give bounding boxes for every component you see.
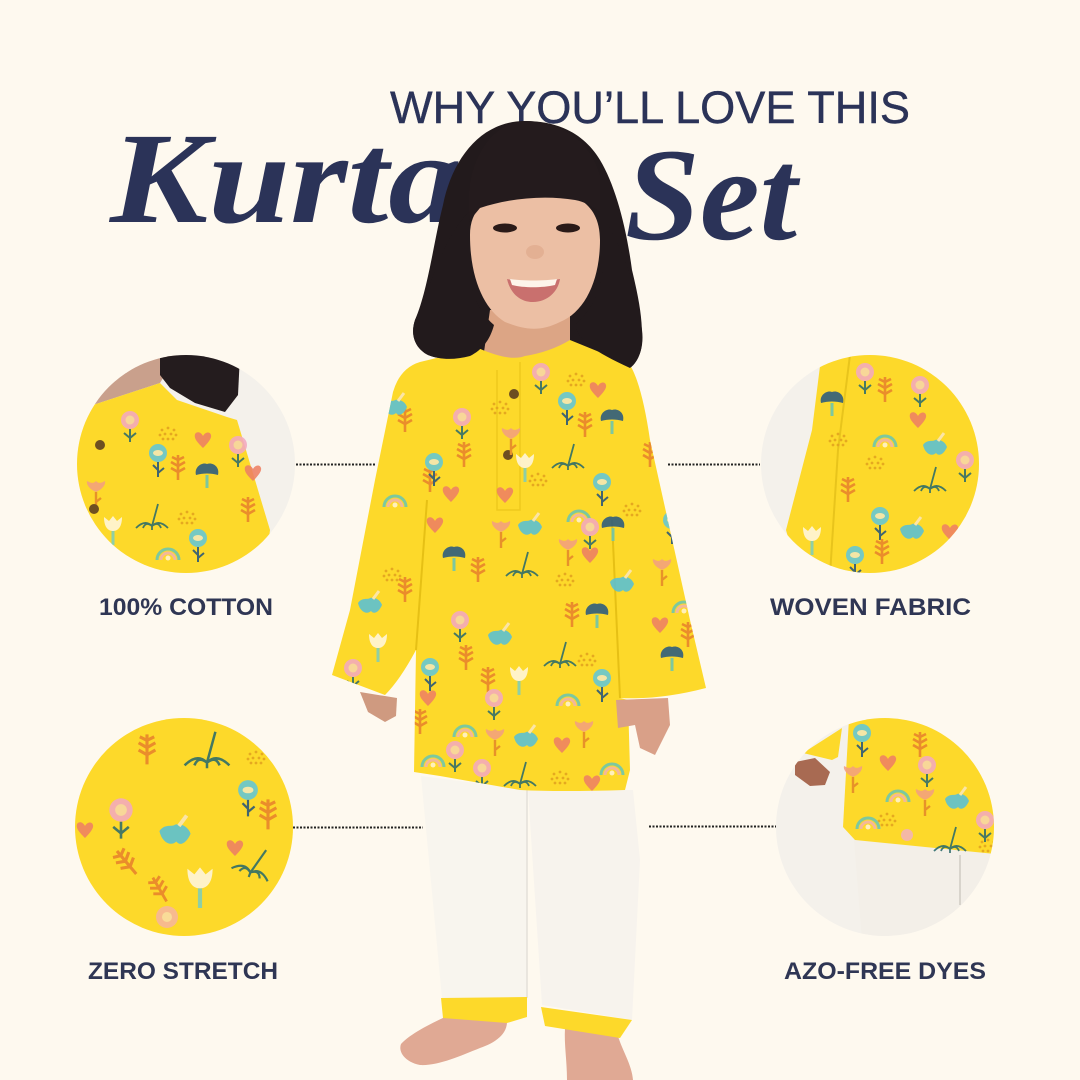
panel: zero stretch detail circle <box>75 718 293 936</box>
kurta <box>332 340 706 791</box>
nose shadow <box>526 245 544 259</box>
pants <box>421 776 640 1038</box>
dotted connector: azo-free <box>649 826 776 828</box>
neck <box>482 310 570 366</box>
feet <box>400 1017 633 1080</box>
front hair sides <box>413 210 642 368</box>
title: Set: Set <box>625 121 800 268</box>
bangs <box>469 121 600 220</box>
dotted connector: cotton <box>296 464 375 466</box>
infographic canvas <box>75 90 994 1080</box>
child figure <box>332 121 706 1080</box>
back hair <box>413 121 642 368</box>
pant cuffs <box>441 997 527 1023</box>
kurta print <box>344 363 695 791</box>
panel: woven fabric detail circle <box>761 355 979 573</box>
label: 100% cotton: 100% COTTON <box>99 594 273 621</box>
label: woven fabric: WOVEN FABRIC <box>770 594 971 621</box>
title: Kurta: Kurta <box>109 107 462 251</box>
eyes <box>493 224 580 232</box>
panel: azo-free dyes detail circle <box>776 718 994 936</box>
smile <box>507 279 560 302</box>
dotted connector: zero stretch <box>293 826 423 828</box>
panel: 100% cotton detail circle <box>77 355 295 573</box>
label: zero stretch: ZERO STRETCH <box>88 958 278 985</box>
face <box>470 190 600 329</box>
dotted connector: woven <box>668 464 760 466</box>
hands <box>360 692 670 755</box>
title: why you'll love this: WHY YOU’LL LOVE THIS <box>390 82 910 133</box>
label: azo-free dyes: AZO-FREE DYES <box>784 958 986 985</box>
